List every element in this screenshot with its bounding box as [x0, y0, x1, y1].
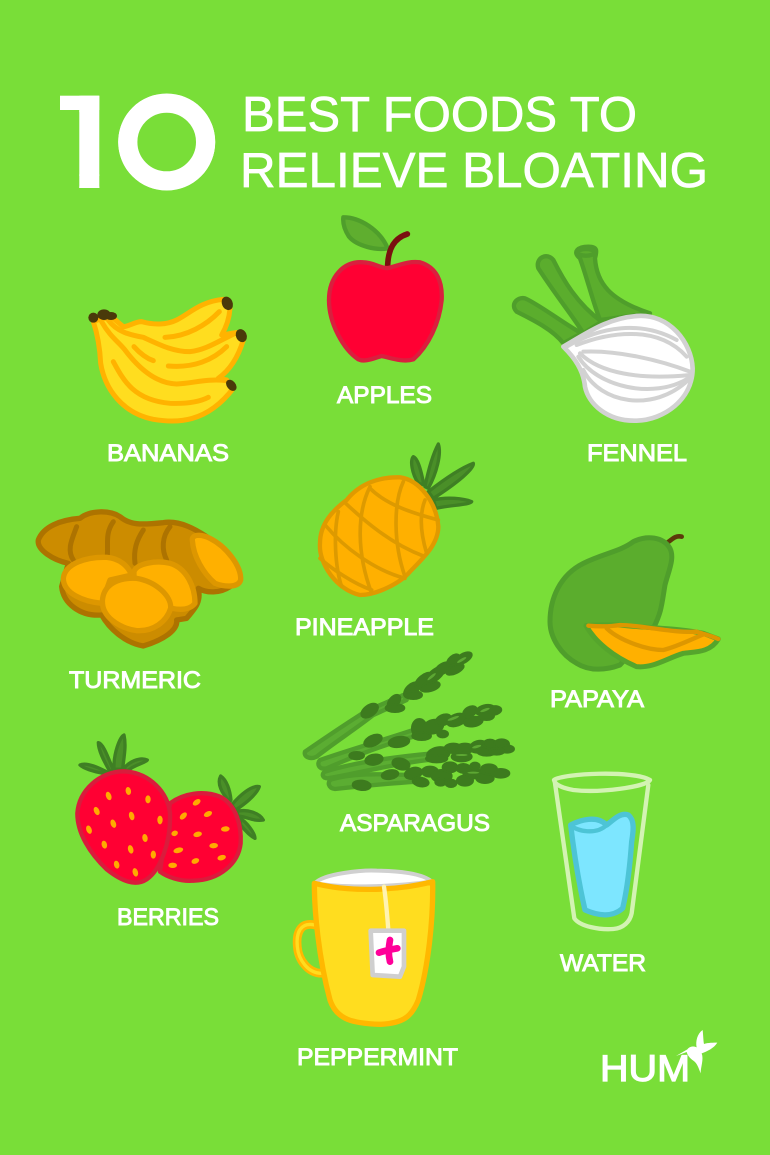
panel: apples — [329, 217, 442, 409]
panel: turmeric — [38, 512, 241, 694]
panel: asparagus — [305, 650, 514, 837]
panel: water — [554, 774, 650, 977]
label: turmeric: TURMERIC — [69, 667, 201, 694]
panel: peppermint — [297, 871, 458, 1071]
panel: fennel — [514, 247, 693, 467]
icon: strawberries — [77, 735, 263, 883]
big number 10: 1 — [49, 68, 124, 217]
panel: berries — [77, 735, 263, 931]
logo: HUM — [600, 1030, 717, 1089]
label: bananas: BANANAS — [107, 440, 229, 467]
icon: turmeric — [38, 512, 241, 646]
label: water: WATER — [560, 950, 646, 977]
label: berries: BERRIES — [117, 904, 219, 931]
heading line 2: RELIEVE BLOATING — [240, 144, 708, 198]
big number 10: 0 — [109, 66, 224, 217]
label: apples: APPLES — [337, 382, 432, 409]
label: fennel: FENNEL — [587, 440, 687, 467]
label: asparagus: ASPARAGUS — [340, 810, 490, 837]
icon: asparagus — [305, 650, 514, 791]
panel: pineapple — [295, 444, 473, 641]
panel: bananas — [88, 295, 249, 467]
icon: hummingbird — [676, 1030, 717, 1073]
heading line 1: BEST FOODS TO — [242, 88, 637, 142]
panel: papaya — [550, 536, 718, 713]
title — [60, 94, 705, 190]
icon: papaya — [550, 536, 718, 669]
label: peppermint: PEPPERMINT — [297, 1044, 458, 1071]
icon: glass of water — [554, 774, 650, 929]
label: papaya: PAPAYA — [550, 686, 644, 713]
icon: tea mug — [297, 871, 433, 1024]
icon: pineapple — [320, 444, 473, 595]
label: pineapple: PINEAPPLE — [295, 614, 434, 641]
icon: bananas — [88, 295, 249, 421]
logo wordmark: HUM — [600, 1048, 690, 1089]
icon: fennel — [514, 247, 693, 421]
big number 10 — [60, 94, 216, 190]
icon: apple — [329, 217, 442, 360]
